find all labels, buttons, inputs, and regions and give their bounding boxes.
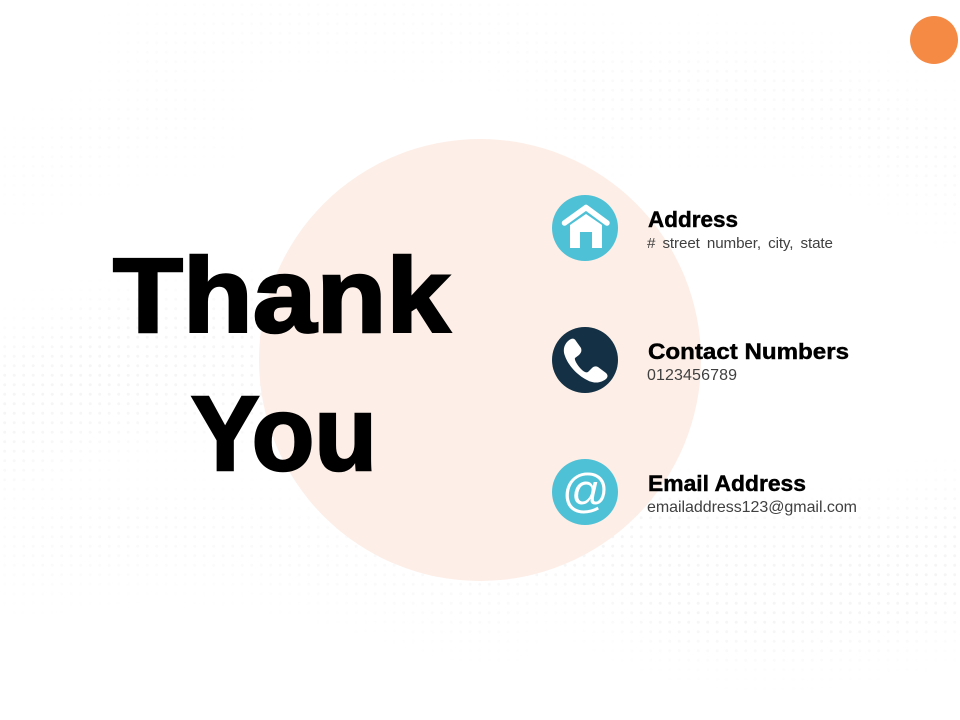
icon: at sign: @ (561, 464, 609, 517)
large peach circle (259, 139, 701, 581)
email value: emailaddress123@gmail.com (647, 499, 857, 516)
contact item: address (552, 195, 833, 261)
contact item: phone (552, 327, 849, 393)
email heading: Email Address (648, 471, 806, 496)
phone number: 0123456789 (647, 367, 737, 384)
title: Thank You: You (191, 375, 377, 493)
contact numbers heading: Contact Numbers (648, 339, 849, 364)
icon: house (552, 195, 618, 261)
address heading: Address (648, 207, 738, 232)
icon: at sign (552, 459, 618, 525)
address detail: # street number, city, state (647, 235, 833, 252)
icon: phone (552, 327, 618, 393)
background dot pattern (4, 328, 956, 633)
contact item: email (552, 459, 857, 525)
title: Thank You: Thank (113, 237, 451, 355)
title: Thank You (113, 237, 451, 493)
orange corner circle (910, 16, 958, 64)
